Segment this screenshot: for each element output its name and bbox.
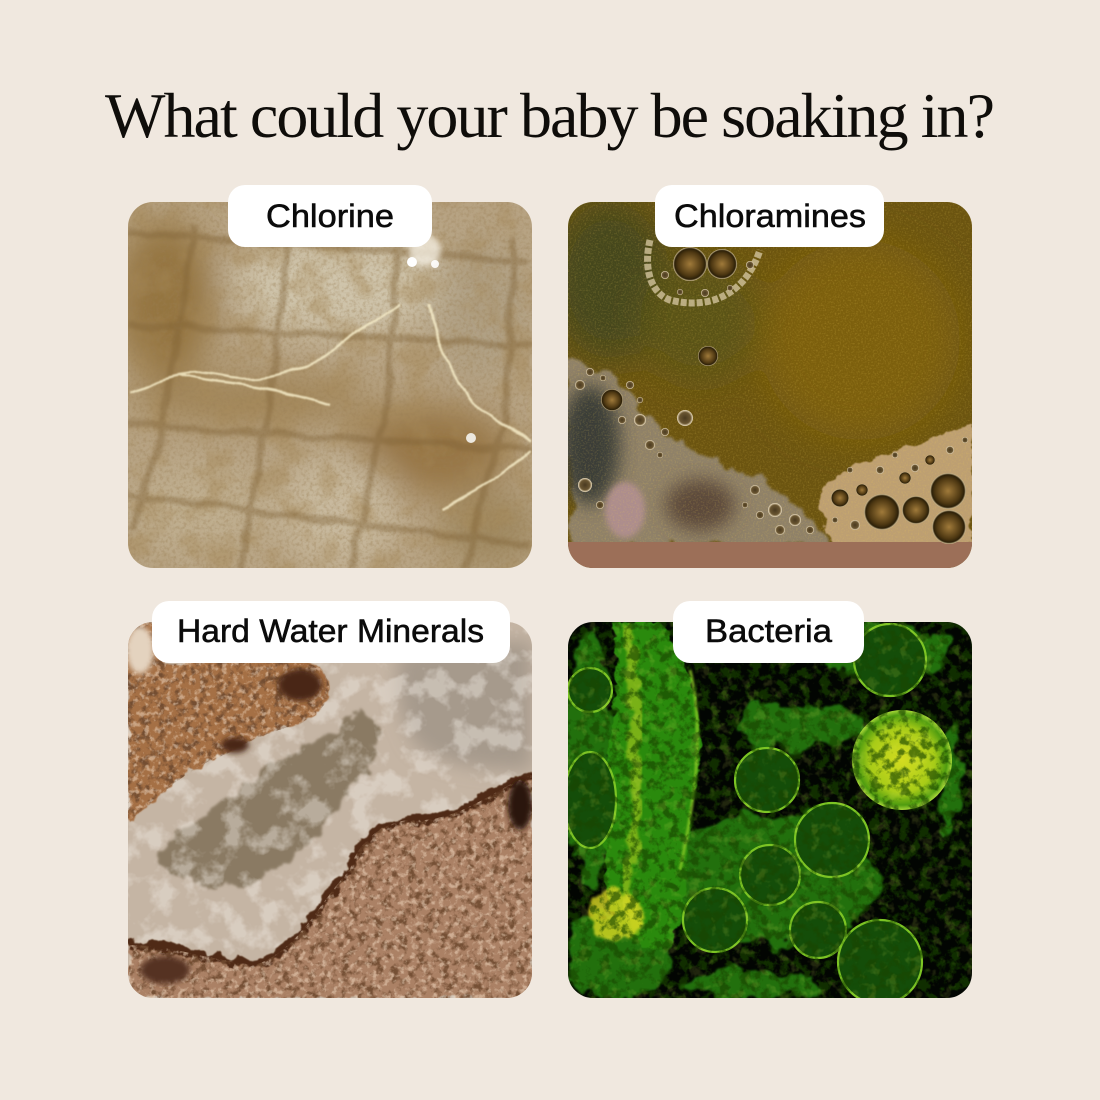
water caustics	[130, 305, 532, 510]
label: hard water minerals: Hard Water Minerals	[177, 613, 484, 649]
panel: chloramines	[550, 200, 972, 568]
hand strip	[568, 542, 972, 568]
panel: chlorine	[115, 202, 540, 570]
label: chlorine: Chlorine	[266, 198, 394, 234]
bubbles	[601, 247, 966, 544]
froth ring	[648, 240, 760, 303]
foam left	[568, 360, 835, 545]
label: hard water minerals	[152, 601, 510, 663]
grey-brown pool	[155, 710, 377, 886]
foam right	[820, 425, 972, 545]
label: bacteria: Bacteria	[705, 613, 832, 649]
title: What could your baby be soaking in?	[105, 80, 995, 151]
label: bacteria	[673, 601, 864, 663]
green diffuse haze	[565, 624, 964, 1000]
bottom right crust	[128, 775, 532, 998]
label: chloramines: Chloramines	[674, 198, 866, 234]
label: chlorine	[228, 185, 432, 247]
tile grid	[128, 215, 532, 568]
tiny foam bubbles	[575, 261, 968, 535]
top left crust	[128, 622, 329, 822]
panel: hard water minerals	[126, 622, 532, 998]
panel: bacteria	[564, 622, 972, 1004]
round virus cells	[564, 624, 926, 1004]
label: chloramines	[655, 185, 884, 247]
rod bacterium	[604, 622, 700, 949]
